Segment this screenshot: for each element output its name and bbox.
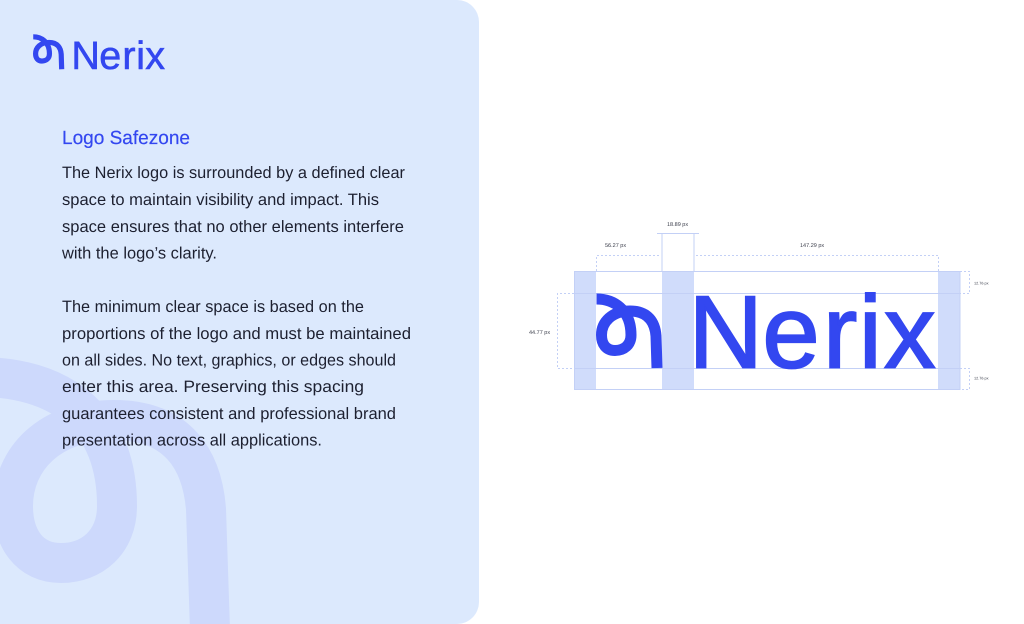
measure labels: 147.29 px: [800, 243, 824, 249]
text block: intro paragraph: [61, 164, 405, 262]
clear space bars: [574, 271, 960, 389]
measure labels: 18.89 px: [667, 222, 688, 228]
heading: Logo Safezone: [62, 128, 190, 149]
logo wordmark: Nerix: [688, 274, 936, 390]
text block: minimum clear space paragraph: guarantees consistent and professional brand: [62, 405, 396, 423]
text block: minimum clear space paragraph: on all sides. No text, graphics, or edges should: [62, 352, 396, 370]
logo: Nerix: Nerix: [71, 34, 165, 78]
measure labels: 12.76 px: [974, 282, 989, 286]
measure labels: 44.77 px: [529, 330, 550, 336]
text block: minimum clear space paragraph: presentation across all applications.: [62, 432, 322, 450]
dashed measures: [558, 256, 970, 390]
guide lines: [574, 233, 960, 390]
measure labels: 12.76 px: [974, 376, 989, 380]
text block: minimum clear space paragraph: The minimum clear space is based on the: [62, 298, 364, 316]
text block: minimum clear space paragraph: proportions of the logo and must be maintained: [62, 325, 411, 343]
text block: intro paragraph: with the logo’s clarity.: [61, 244, 217, 262]
measure labels: 56.27 px: [605, 243, 626, 249]
text block: minimum clear space paragraph: enter this area. Preserving this spacing: [62, 378, 364, 396]
text block: intro paragraph: space ensures that no other elements interfere: [62, 218, 404, 236]
measure labels: [529, 222, 989, 380]
logo mark: [596, 299, 657, 368]
text block: intro paragraph: space to maintain visibility and impact. This: [62, 191, 379, 209]
panel: left description: [0, 0, 479, 624]
icon: large background logo mark: [0, 358, 230, 624]
text block: minimum clear space paragraph: [62, 298, 411, 450]
text block: intro paragraph: The Nerix logo is surrounded by a defined clear: [62, 164, 405, 182]
